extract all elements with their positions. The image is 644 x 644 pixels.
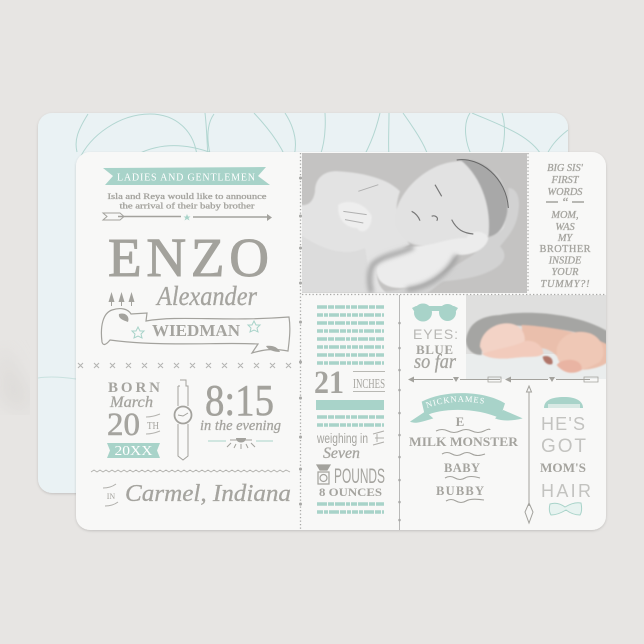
panel: eyes — [412, 304, 458, 373]
location — [103, 481, 291, 507]
icon: trees — [108, 292, 134, 306]
MILK MONSTER: MILK MONSTER — [409, 434, 519, 449]
panel: big sis first words: WORDS — [548, 187, 582, 198]
panel: big sis first words: BIG SIS' — [547, 163, 584, 174]
in ornament — [103, 484, 118, 506]
panel: big sis first words: WAS — [555, 222, 575, 233]
weighing in: weighing in — [316, 430, 368, 446]
middle name: Alexander: Alexander — [155, 281, 257, 311]
icon: wristwatch — [174, 380, 192, 460]
so far: so far — [414, 351, 456, 373]
wave dividers — [436, 429, 490, 502]
banner: ladies and gentlemen: LADIES AND GENTLEMEN — [117, 172, 255, 184]
arrows under photo row — [408, 376, 598, 382]
city: Carmel, Indiana — [125, 481, 291, 507]
BORN: BORN — [108, 380, 160, 396]
BUBBY: BUBBY — [436, 484, 484, 498]
panel: big sis first words: FIRST — [551, 175, 580, 186]
icon: comb — [544, 397, 583, 408]
in ornament: IN — [107, 492, 115, 501]
panel: birth date — [107, 380, 160, 459]
day 20: 20 — [107, 407, 140, 443]
in the evening: in the evening — [200, 418, 281, 434]
back of card with teal scribble — [38, 113, 568, 493]
teal arrow rows bottom — [317, 504, 384, 512]
icon: scale — [317, 465, 330, 484]
front card — [76, 152, 606, 530]
panel: big sis first words — [540, 163, 591, 290]
photo: baby in knit hat (colour) — [466, 295, 608, 379]
POUNDS: POUNDS — [334, 465, 385, 488]
TH: TH — [147, 420, 159, 432]
BLUE: BLUE — [416, 342, 453, 357]
teal arrow rows middle — [317, 417, 384, 425]
year banner: 20XX — [114, 444, 152, 459]
ornament: in — [373, 431, 384, 445]
surname: WIEDMAN — [152, 321, 241, 340]
EYES:: EYES: — [413, 326, 458, 342]
teal arrow rows top — [317, 307, 384, 363]
teal ruler bar — [316, 400, 384, 410]
ribbon outline — [101, 309, 290, 353]
panel: nicknames — [409, 393, 522, 503]
panel: big sis first words: BROTHER — [540, 244, 591, 255]
time 8:15: 8:15 — [205, 376, 274, 425]
panel: measurements — [314, 307, 385, 512]
BABY: BABY — [444, 461, 480, 475]
dotted panel dividers — [300, 153, 606, 530]
panel: big sis first words: INSIDE — [548, 256, 582, 266]
nickname E: E — [456, 414, 464, 429]
panel: big sis first words: MY — [557, 233, 573, 244]
HAIR: HAIR — [541, 481, 591, 501]
zigzag divider — [91, 470, 290, 472]
name: ENZO: ENZO — [108, 227, 269, 288]
icon: bow tie — [549, 503, 582, 515]
announcement text: Isla and Reya would like to announce — [108, 192, 267, 201]
panel: big sis first words: MOM, — [550, 210, 579, 221]
panel: mom's hair — [540, 397, 591, 515]
Seven: Seven — [323, 445, 360, 462]
MOM'S: MOM'S — [540, 461, 586, 475]
panel: announcement — [103, 167, 272, 221]
8 OUNCES: 8 OUNCES — [319, 485, 382, 499]
stitched x divider — [78, 363, 291, 368]
announcement text — [108, 192, 267, 210]
GOT: GOT — [541, 436, 586, 457]
panel: big sis first words: TUMMY?! — [540, 279, 590, 290]
icon: sun ornament — [208, 438, 273, 449]
INCHES — [353, 372, 385, 392]
photo: newborn sleeping in hand (black and white) — [300, 153, 527, 293]
ribbon with surname — [101, 309, 290, 353]
INCHES: INCHES — [353, 377, 385, 392]
icon: vertical arrow — [525, 386, 533, 523]
HE'S: HE'S — [541, 414, 585, 434]
icon: sunglasses — [412, 304, 458, 322]
21: 21 — [314, 365, 344, 401]
announcement text: the arrival of their baby brother — [120, 202, 255, 210]
stars — [132, 321, 260, 338]
quote ornament: “ — [561, 194, 569, 209]
panel: big sis first words: YOUR — [552, 267, 579, 278]
banner: nicknames: NICKNAMES — [426, 396, 484, 408]
arrow with star — [103, 213, 272, 221]
ribbon folds — [119, 313, 280, 352]
March: March — [109, 394, 153, 411]
banner: ladies and gentlemen — [103, 167, 270, 185]
